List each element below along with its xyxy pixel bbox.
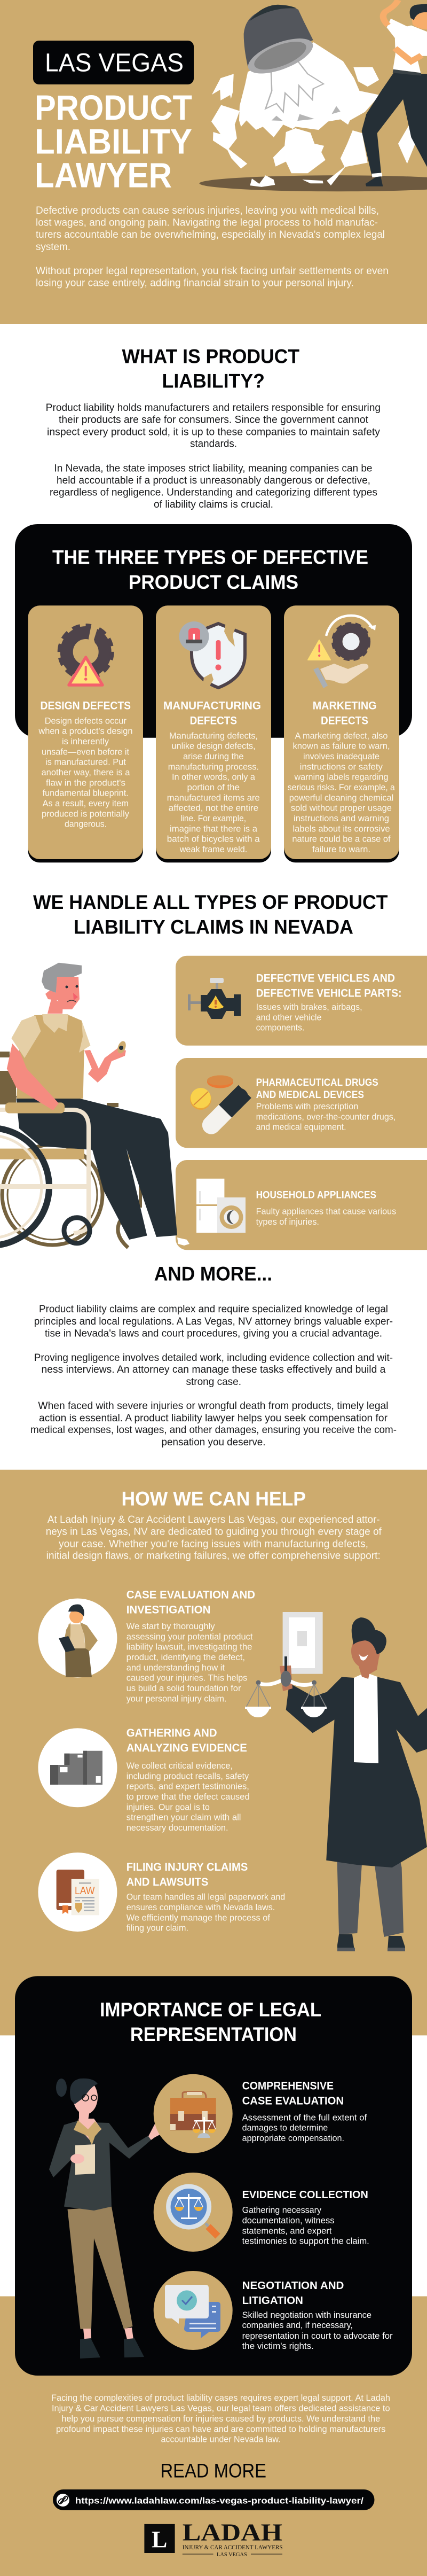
- text: manufacturing defects: unlike design defects,: [171, 742, 256, 751]
- text: gathering evidence: We collect critical evidence,: [126, 1761, 233, 1771]
- text: manufacturing defects: weak frame weld.: [179, 845, 247, 854]
- heading: we handle all types: WE HANDLE ALL TYPES OF PRODUCT: [33, 891, 388, 913]
- heading: three types: PRODUCT CLAIMS: [129, 571, 298, 593]
- illustration: man in wheelchair: [0, 963, 189, 1248]
- text: defective vehicles: [256, 1002, 362, 1033]
- icon: engine with warning: [188, 978, 241, 1019]
- icon: law book in circle: LAW: [75, 1885, 95, 1897]
- text: design defects: flaw in the product's: [46, 778, 125, 788]
- icon: gear, warning and hand: [308, 616, 376, 688]
- text: marketing defects: powerful cleaning chemical: [289, 793, 393, 803]
- heading: we handle all types: [33, 891, 388, 938]
- badge: Las Vegas: LAS VEGAS: [45, 49, 184, 77]
- heading: and more: AND MORE...: [154, 1263, 272, 1285]
- logo: Ladah: LADAH: [183, 2519, 282, 2546]
- text: case evaluation: assessing your potential product: [126, 1632, 253, 1641]
- text: evidence collection: Gathering necessary: [242, 2206, 322, 2215]
- intro text: [36, 205, 389, 289]
- text: closing paragraph: Injury & Car Accident Lawyers Las Vegas, our legal team offers dedicated assistance to: [52, 2404, 390, 2414]
- heading: what is product liability: LIABILITY?: [162, 370, 265, 392]
- heading: read more: READ MORE: [160, 2460, 266, 2482]
- text: design defects: Design defects occur: [45, 716, 126, 726]
- heading: three types: [52, 547, 368, 593]
- text: marketing defects: nature could be a case of: [292, 835, 391, 844]
- icon: chain link: [57, 2494, 69, 2507]
- heading: gathering evidence: GATHERING AND: [126, 1727, 217, 1739]
- link pill: https://www.ladahlaw.com/las-vegas-product-liability-lawyer/: [75, 2495, 363, 2505]
- text: case evaluation: caused your injuries. This helps: [126, 1674, 247, 1683]
- text: manufacturing defects: portion of the: [187, 783, 240, 792]
- heading: pharmaceutical drugs: AND MEDICAL DEVICES: [256, 1089, 364, 1101]
- text: product liability explanation: [46, 402, 381, 510]
- text: case evaluation: [126, 1622, 253, 1703]
- text: how we can help intro: neys in Las Vegas, NV are dedicated to guiding you through every stage of: [46, 1527, 382, 1538]
- card: manufacturing defects: [156, 605, 271, 862]
- icon: law book in circle: [38, 1853, 117, 1932]
- heading: manufacturing defects: [163, 700, 261, 727]
- text: marketing defects: labels about its corrosive: [292, 824, 390, 834]
- text: design defects: produced is potentially: [42, 809, 130, 819]
- text: product liability explanation: inspect every product sold, it is up to these companies to maintain safety: [47, 426, 381, 438]
- intro text: lost wages, and ongoing pain. Navigating the legal process to hold manufac-: [36, 217, 378, 229]
- logo: Ladah: L: [152, 2526, 167, 2552]
- illustration: broken light bulb and startled man: [199, 0, 427, 191]
- intro text: Defective products can cause serious injuries, leaving you with medical bills,: [36, 205, 379, 216]
- text: marketing defects: A marketing defect, also: [295, 731, 388, 741]
- heading: what is product liability: [122, 345, 299, 392]
- text: gathering evidence: injuries. Our goal is to: [126, 1802, 210, 1812]
- icon: fridge and washer: [196, 1179, 246, 1233]
- logo: Ladah: [144, 2519, 283, 2558]
- heading: evidence collection: EVIDENCE COLLECTION: [242, 2189, 368, 2201]
- title: PRODUCT: [35, 88, 192, 127]
- text: product liability explanation: of liability claims is crucial.: [154, 499, 273, 510]
- heading: negotiation and litigation: NEGOTIATION AND: [242, 2280, 344, 2292]
- text: manufacturing defects: manufactured items are: [167, 793, 260, 803]
- illustration: woman with clipboard: [49, 2079, 165, 2359]
- text: and more: [30, 1304, 397, 1448]
- text: product liability explanation: held accountable if a product is unreasonably dangerous or defective,: [57, 475, 370, 486]
- text: design defects: when a product's design: [38, 727, 133, 736]
- illustration: lawyer holding scales: [245, 1612, 427, 1951]
- text: manufacturing defects: Manufacturing defects,: [169, 731, 258, 741]
- text: and more: pensation you deserve.: [161, 1437, 266, 1448]
- title: LIABILITY: [35, 122, 192, 161]
- text: household appliances: types of injuries.: [256, 1217, 319, 1227]
- text: product liability explanation: standards.: [190, 439, 237, 450]
- text: manufacturing defects: manufacturing process.: [168, 762, 259, 772]
- text: defective vehicles: components.: [256, 1023, 304, 1033]
- text: negotiation and litigation: the victim's rights.: [242, 2341, 314, 2351]
- text: case evaluation: liability lawsuit, investigating the: [126, 1643, 252, 1652]
- text: manufacturing defects: affected, not the entire: [169, 804, 258, 813]
- text: case evaluation: your personal injury claim.: [126, 1694, 226, 1703]
- logo: Ladah: LAS VEGAS: [217, 2551, 247, 2558]
- text: evidence collection: documentation, witness: [242, 2216, 334, 2225]
- badge: Las Vegas: [33, 41, 194, 84]
- text: filing claims: Our team handles all legal paperwork and: [126, 1893, 285, 1902]
- text: marketing defects: failure to warn.: [312, 845, 370, 854]
- text: filing claims: [126, 1893, 285, 1933]
- heading: negotiation and litigation: [242, 2280, 344, 2307]
- text: design defects: is inherently: [62, 737, 109, 746]
- text: marketing defects: sold without proper usage: [291, 804, 392, 813]
- text: pharmaceutical drugs: [256, 1102, 396, 1132]
- panel: how we can help: [0, 1470, 427, 2035]
- text: comprehensive case evaluation: [242, 2113, 367, 2143]
- icon: cracked shield with siren: [179, 620, 245, 688]
- text: marketing defects: instructions and warning: [294, 814, 389, 823]
- text: pharmaceutical drugs: medications, over-the-counter drugs,: [256, 1112, 396, 1122]
- card: marketing defects: [284, 605, 399, 862]
- heading: manufacturing defects: MANUFACTURING: [163, 700, 261, 712]
- heading: defective vehicles: [256, 972, 401, 1000]
- heading: marketing defects: MARKETING: [313, 700, 377, 712]
- card: household appliances: [176, 1160, 427, 1250]
- heading: pharmaceutical drugs: [256, 1077, 378, 1101]
- text: manufacturing defects: arise during the: [183, 752, 244, 761]
- heading: case evaluation: [126, 1589, 255, 1616]
- text: negotiation and litigation: representation in court to advocate for: [242, 2331, 393, 2341]
- text: pharmaceutical drugs: and medical equipment.: [256, 1123, 346, 1132]
- panel: bottom gold background: [0, 2297, 427, 2576]
- text: design defects: another way, there is a: [42, 768, 130, 777]
- text: filing claims: ensures compliance with Nevada laws.: [126, 1903, 275, 1912]
- text: closing paragraph: accountable under Nevada law.: [161, 2434, 281, 2444]
- heading: comprehensive case evaluation: COMPREHENSIVE: [242, 2080, 334, 2092]
- text: negotiation and litigation: [242, 2310, 393, 2351]
- icon: pills and capsule: [190, 1075, 252, 1138]
- heading: how we can help: HOW WE CAN HELP: [122, 1488, 306, 1510]
- text: case evaluation: We start by thoroughly: [126, 1622, 215, 1631]
- heading: importance of legal representation: REPRESENTATION: [130, 2024, 297, 2045]
- text: marketing defects: warning labels regarding: [294, 773, 389, 782]
- text: filing claims: filing your claim.: [126, 1924, 188, 1933]
- heading: comprehensive case evaluation: CASE EVALUATION: [242, 2095, 344, 2107]
- text: marketing defects: [288, 731, 396, 854]
- text: defective vehicles: Issues with brakes, airbags,: [256, 1002, 362, 1012]
- text: household appliances: [256, 1207, 396, 1227]
- heading: negotiation and litigation: LITIGATION: [242, 2295, 303, 2307]
- text: marketing defects: serious risks. For example, a: [288, 783, 396, 792]
- text: gathering evidence: reports, and expert testimonies,: [126, 1782, 249, 1792]
- panel: importance of legal representation: [15, 1976, 412, 2376]
- text: manufacturing defects: [167, 731, 260, 854]
- title: LAWYER: [35, 155, 172, 195]
- text: marketing defects: involves inadequate: [303, 752, 379, 761]
- text: manufacturing defects: In other words, only a: [172, 773, 256, 782]
- text: and more: Product liability claims are complex and require specialized knowledge of legal: [39, 1304, 388, 1315]
- icon: cracked gear with warning: [60, 622, 112, 685]
- text: manufacturing defects: batch of bicycles with a: [167, 835, 260, 844]
- intro text: losing your case entirely, adding financial strain to your personal injury.: [36, 277, 354, 289]
- text: closing paragraph: [51, 2393, 390, 2444]
- card: pharmaceutical drugs: [176, 1058, 427, 1148]
- link pill: [53, 2489, 375, 2510]
- heading: design defects: DESIGN DEFECTS: [41, 700, 131, 712]
- text: filing claims: We efficiently manage the process of: [126, 1913, 270, 1923]
- heading: case evaluation: INVESTIGATION: [126, 1604, 210, 1616]
- text: gathering evidence: necessary documentation.: [126, 1823, 228, 1833]
- text: gathering evidence: strengthen your claim with all: [126, 1813, 241, 1823]
- text: closing paragraph: Facing the complexities of product liability cases requires expert legal support. At Ladah: [51, 2393, 390, 2403]
- text: comprehensive case evaluation: Assessment of the full extent of: [242, 2113, 367, 2122]
- text: comprehensive case evaluation: damages to determine: [242, 2123, 328, 2133]
- text: closing paragraph: profound impact these injuries can have and are committed to holding manufacturers: [56, 2424, 385, 2434]
- panel: three types of defective product claims: [15, 524, 412, 862]
- text: marketing defects: instructions or safety: [300, 762, 383, 772]
- intro text: Without proper legal representation, you risk facing unfair settlements or even: [36, 266, 389, 277]
- text: and more: action is essential. A product liability lawyer helps you seek compensation for: [39, 1413, 388, 1424]
- heading: filing claims: [126, 1861, 248, 1888]
- text: evidence collection: statements, and expert: [242, 2226, 332, 2236]
- text: marketing defects: known as failure to warn,: [292, 742, 390, 751]
- text: and more: tise in Nevada's laws and court procedures, giving you a crucial advantage.: [45, 1328, 382, 1339]
- card: defective vehicles: [176, 956, 427, 1046]
- text: manufacturing defects: line. For example,: [180, 814, 246, 823]
- text: case evaluation: and understanding how it: [126, 1663, 225, 1672]
- text: case evaluation: us build a solid foundation for: [126, 1684, 241, 1693]
- heading: three types: THE THREE TYPES OF DEFECTIVE: [52, 547, 368, 569]
- text: closing paragraph: help you pursue compensation for injuries caused by products. We understand the: [61, 2414, 380, 2424]
- heading: case evaluation: CASE EVALUATION AND: [126, 1589, 255, 1601]
- heading: household appliances: HOUSEHOLD APPLIANCES: [256, 1189, 376, 1201]
- text: and more: medical expenses, lost wages, and other damages, ensuring you receive the com-: [30, 1425, 397, 1436]
- text: defective vehicles: and other vehicle: [256, 1013, 321, 1022]
- icon: chat bubbles with check: [154, 2271, 233, 2350]
- text: design defects: dangerous.: [65, 820, 107, 829]
- text: household appliances: Faulty appliances that cause various: [256, 1207, 396, 1216]
- panel: hero: [0, 0, 427, 324]
- text: product liability explanation: In Nevada, the state imposes strict liability, meaning companies can be: [54, 463, 373, 474]
- heading: gathering evidence: [126, 1727, 247, 1754]
- text: design defects: fundamental blueprint.: [43, 789, 129, 798]
- heading: importance of legal representation: IMPORTANCE OF LEGAL: [100, 1998, 321, 2020]
- heading: defective vehicles: DEFECTIVE VEHICLES AND: [256, 972, 395, 985]
- text: negotiation and litigation: Skilled negotiation with insurance: [242, 2310, 371, 2320]
- heading: what is product liability: WHAT IS PRODUCT: [122, 345, 299, 367]
- text: gathering evidence: to prove that the defect caused: [126, 1792, 250, 1802]
- text: comprehensive case evaluation: appropriate compensation.: [242, 2134, 344, 2143]
- text: negotiation and litigation: companies and, if necessary,: [242, 2321, 353, 2330]
- text: design defects: unsafe—even before it: [42, 747, 129, 757]
- text: product liability explanation: Product liability holds manufacturers and retailers responsible for ensuring: [46, 402, 381, 414]
- icon: boxes in circle: [38, 1728, 117, 1807]
- text: and more: When faced with severe injuries or wrongful death from products, timely legal: [38, 1400, 389, 1412]
- text: how we can help intro: initial design flaws, or marketing failures, we offer comprehensive support:: [46, 1551, 381, 1562]
- text: gathering evidence: including product recalls, safety: [126, 1771, 249, 1781]
- text: pharmaceutical drugs: Problems with prescription: [256, 1102, 358, 1111]
- text: evidence collection: testimonies to support the claim.: [242, 2236, 369, 2246]
- title: [35, 88, 192, 195]
- text: design defects: As a result, every item: [43, 799, 129, 808]
- text: case evaluation: product, identifying the defect,: [126, 1653, 245, 1662]
- icon: briefcase with scales: [154, 2074, 233, 2153]
- heading: defective vehicles: DEFECTIVE VEHICLE PARTS:: [256, 987, 401, 1000]
- text: design defects: is manufactured. Put: [45, 758, 126, 767]
- icon: man with book in circle: [38, 1599, 117, 1678]
- heading: marketing defects: DEFECTS: [321, 714, 368, 727]
- text: product liability explanation: regardless of negligence. Understanding and categorizing different types: [50, 487, 377, 498]
- heading: importance of legal representation: [100, 1998, 321, 2045]
- text: design defects: [38, 716, 133, 829]
- text: how we can help intro: your case. Whether you're facing issues with manufacturing defects,: [59, 1538, 368, 1550]
- card: design defects: [28, 605, 143, 862]
- heading: pharmaceutical drugs: PHARMACEUTICAL DRUGS: [256, 1077, 378, 1088]
- text: evidence collection: [242, 2206, 369, 2246]
- heading: comprehensive case evaluation: [242, 2080, 344, 2107]
- intro text: turers accountable can be overwhelming, especially in Nevada's complex legal: [36, 229, 385, 240]
- heading: manufacturing defects: DEFECTS: [190, 714, 237, 727]
- text: gathering evidence: [126, 1761, 250, 1833]
- text: and more: strong case.: [186, 1376, 241, 1388]
- heading: filing claims: FILING INJURY CLAIMS: [126, 1861, 248, 1873]
- text: product liability explanation: their products are safe for consumers. Since the government cannot: [59, 415, 369, 426]
- heading: filing claims: AND LAWSUITS: [126, 1876, 208, 1888]
- text: how we can help intro: At Ladah Injury & Car Accident Lawyers Las Vegas, our experienced attor-: [48, 1514, 380, 1526]
- logo: Ladah: INJURY & CAR ACCIDENT LAWYERS: [183, 2544, 283, 2551]
- text: and more: principles and local regulations. A Las Vegas, NV attorney brings valuable exper-: [34, 1316, 393, 1327]
- intro text: system.: [36, 242, 70, 253]
- icon: magnifier with scales: [154, 2173, 233, 2252]
- heading: we handle all types: LIABILITY CLAIMS IN NEVADA: [74, 916, 353, 938]
- text: manufacturing defects: imagine that there is a: [170, 824, 258, 834]
- text: how we can help intro: [46, 1514, 382, 1562]
- text: and more: Proving negligence involves detailed work, including evidence collection and wit-: [34, 1352, 393, 1364]
- heading: marketing defects: [313, 700, 377, 727]
- heading: gathering evidence: ANALYZING EVIDENCE: [126, 1742, 247, 1754]
- text: and more: ness interviews. An attorney can manage these tasks effectively and build a: [42, 1364, 386, 1375]
